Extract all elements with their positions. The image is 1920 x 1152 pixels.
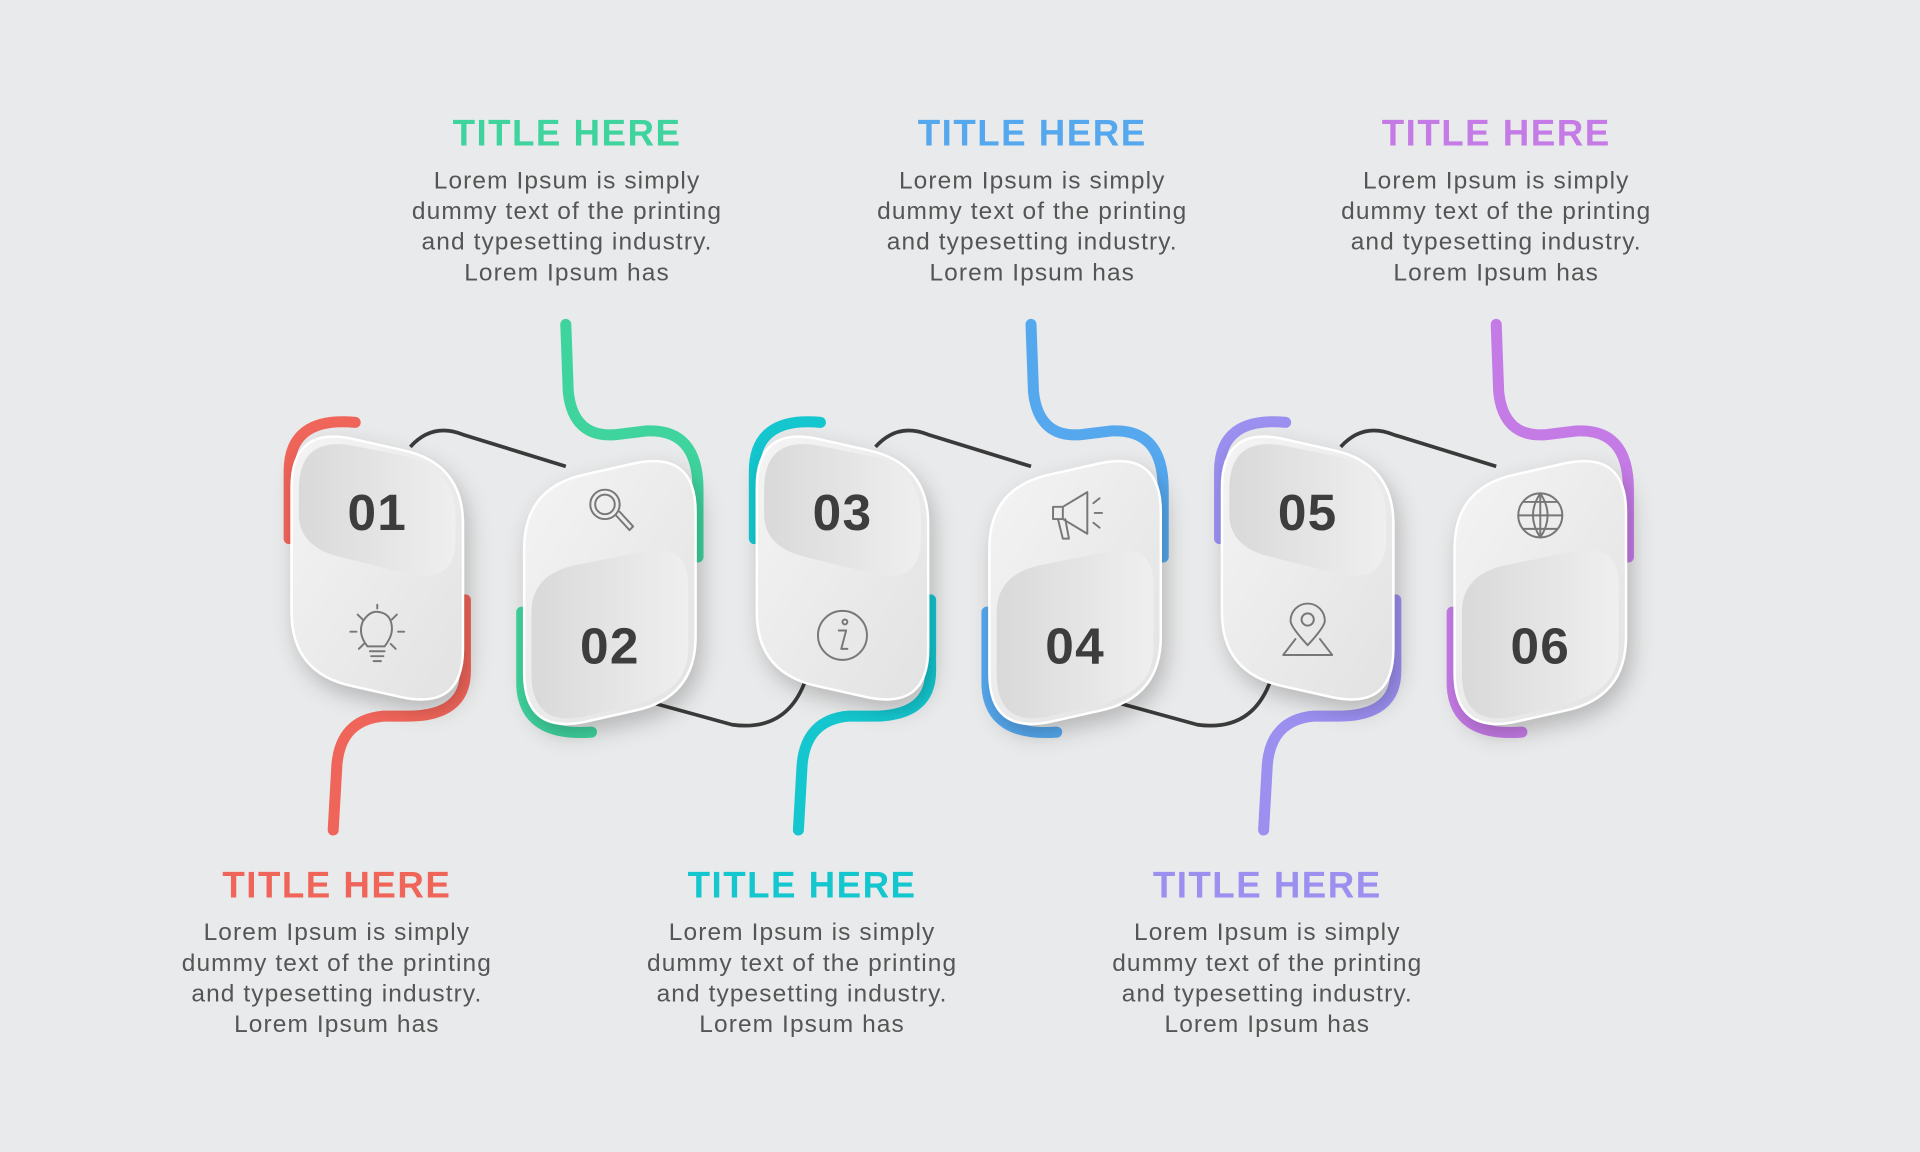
step 01 card: 01 [347, 483, 407, 541]
text block 04 (top): TITLE HERE [918, 113, 1147, 154]
step 03 card: 03 [813, 483, 872, 541]
text block 02 (top): Lorem Ipsum has [464, 259, 670, 286]
text block 01 (bottom): Lorem Ipsum is simply [204, 919, 470, 946]
text block 03 (bottom): Lorem Ipsum has [699, 1011, 905, 1038]
icon: megaphone [1053, 492, 1102, 539]
text block 01 (bottom): Lorem Ipsum has [234, 1011, 440, 1038]
step 05 card [1220, 422, 1396, 830]
step 04 card: 04 [1045, 617, 1105, 675]
text block 05 (bottom): Lorem Ipsum is simply [1134, 919, 1401, 946]
text block 03 (bottom): dummy text of the printing [647, 950, 957, 977]
icon: globe [1518, 493, 1562, 537]
text block 04 (top): Lorem Ipsum has [929, 259, 1135, 286]
text block 05 (bottom) [1112, 864, 1422, 1038]
text block 02 (top): and typesetting industry. [422, 229, 713, 256]
text block 01 (bottom): and typesetting industry. [191, 980, 482, 1007]
step 01 card [289, 422, 465, 830]
text block 03 (bottom): and typesetting industry. [657, 980, 948, 1007]
text block 03 (bottom): Lorem Ipsum is simply [669, 919, 935, 946]
text block 06 (top): and typesetting industry. [1351, 229, 1642, 256]
icon: magnifier [590, 490, 633, 530]
text block 02 (top) [412, 113, 722, 286]
step 02 card [522, 324, 698, 733]
icon: info [818, 611, 867, 660]
text block 05 (bottom): TITLE HERE [1153, 864, 1382, 905]
text block 03 (bottom): TITLE HERE [688, 864, 917, 905]
icon: map pin [1283, 604, 1332, 655]
step 03 card [754, 422, 931, 830]
text block 06 (top) [1341, 113, 1651, 286]
text block 01 (bottom): TITLE HERE [222, 864, 451, 905]
step 06 card [1452, 324, 1628, 733]
text block 02 (top): Lorem Ipsum is simply [434, 168, 700, 195]
connector lines [410, 431, 1496, 726]
text block 02 (top): TITLE HERE [453, 113, 681, 154]
text block 06 (top): dummy text of the printing [1341, 198, 1651, 225]
icon: lightbulb [350, 605, 404, 661]
text block 02 (top): dummy text of the printing [412, 198, 722, 225]
text block 06 (top): Lorem Ipsum is simply [1363, 168, 1629, 195]
text block 05 (bottom): dummy text of the printing [1112, 950, 1422, 977]
text block 05 (bottom): and typesetting industry. [1122, 980, 1413, 1007]
step 04 card [987, 324, 1163, 733]
text block 03 (bottom) [647, 864, 957, 1038]
text block 01 (bottom) [182, 864, 492, 1038]
step 05 card: 05 [1278, 483, 1338, 541]
text block 04 (top): Lorem Ipsum is simply [899, 168, 1165, 195]
text block 04 (top): dummy text of the printing [877, 198, 1187, 225]
text block 06 (top): TITLE HERE [1382, 113, 1611, 154]
step 02 card: 02 [580, 617, 640, 675]
text block 06 (top): Lorem Ipsum has [1393, 259, 1599, 286]
text block 05 (bottom): Lorem Ipsum has [1164, 1011, 1370, 1038]
step 06 card: 06 [1510, 617, 1570, 675]
text block 04 (top) [877, 113, 1187, 286]
text block 04 (top): and typesetting industry. [887, 229, 1178, 256]
text block 01 (bottom): dummy text of the printing [182, 950, 492, 977]
